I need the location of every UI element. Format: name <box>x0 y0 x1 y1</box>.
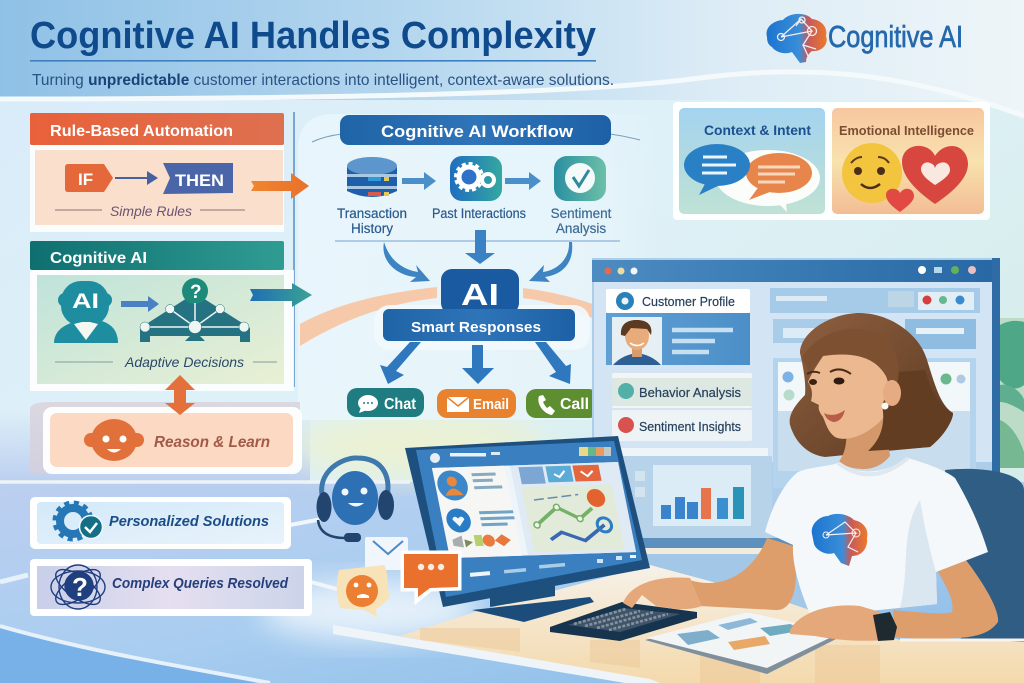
arrow: database to gears <box>402 172 436 190</box>
fringe <box>802 329 899 388</box>
AI person icon <box>54 281 118 343</box>
tangled question icon: ? <box>72 572 88 602</box>
monitor screen contents <box>432 462 636 558</box>
white band <box>592 448 768 456</box>
smile <box>824 410 845 422</box>
arrow: to email <box>462 345 494 384</box>
t-shirt <box>765 458 988 614</box>
arrow: teal <box>250 283 312 307</box>
arrow: to call <box>535 342 571 384</box>
context and intent heading: Context & Intent <box>704 123 812 138</box>
label: transaction history: History <box>351 221 393 236</box>
title: Cognitive AI Handles Complexity <box>30 15 596 57</box>
right dashboard panels <box>770 288 980 488</box>
smart responses halo <box>374 305 590 350</box>
emoji face icon <box>842 143 902 203</box>
customer profile card <box>606 289 750 365</box>
office chair <box>945 469 1024 642</box>
button: chat: Chat <box>384 396 417 413</box>
label: transaction history: Transaction <box>337 206 407 221</box>
eyes and brows <box>807 369 851 385</box>
arrow to decision tree <box>121 296 159 312</box>
simple rules caption: Simple Rules <box>110 203 192 219</box>
button: email: Email <box>473 396 509 413</box>
behavior analysis row: Behavior Analysis <box>639 385 741 400</box>
button: call: Call <box>560 396 589 413</box>
customer profile card: Customer Profile <box>642 294 735 309</box>
logo: Cognitive AI <box>767 14 963 63</box>
behavior analysis row <box>612 373 752 408</box>
double arrow <box>165 375 195 415</box>
panel: rule-based automation: Rule-Based Automation <box>50 123 233 140</box>
icon: sentiment check <box>554 156 606 201</box>
desk <box>333 565 1024 683</box>
icon: sad face bubble <box>337 565 390 617</box>
connector lines <box>290 519 340 590</box>
window dots <box>604 266 976 274</box>
arrow if to then <box>115 171 158 185</box>
large background monitor <box>592 258 1000 548</box>
monitor bottom toolbar <box>470 555 636 577</box>
keyboard <box>550 602 697 641</box>
speech bubbles icon <box>684 144 820 212</box>
personalized solutions label: Personalized Solutions <box>109 513 269 530</box>
avatar <box>613 320 661 365</box>
t-shirt collar <box>838 458 908 474</box>
arrow: orange <box>251 173 309 199</box>
label: sentiment analysis: Sentiment <box>551 206 612 221</box>
left hand <box>623 577 702 609</box>
small heart icon <box>886 189 914 212</box>
complex queries label: Complex Queries Resolved <box>112 575 289 592</box>
neck <box>838 415 890 469</box>
right arm <box>893 555 998 639</box>
orange arc right <box>523 288 602 324</box>
decision network icon <box>140 278 250 342</box>
icon: database <box>347 157 397 197</box>
smart responses bar: Smart Responses <box>411 319 541 336</box>
title underline <box>30 60 596 62</box>
icon: headset robot <box>316 458 394 542</box>
woman <box>623 313 998 641</box>
button: call <box>526 389 599 418</box>
panel: personalized solutions <box>30 497 291 549</box>
smart responses bar <box>383 309 575 341</box>
label: sentiment analysis: Analysis <box>556 221 606 236</box>
heart icon <box>902 146 968 204</box>
label: past interactions: Past Interactions <box>432 206 526 221</box>
right hand <box>790 605 884 641</box>
THEN shape <box>163 163 233 194</box>
button: email <box>437 389 516 418</box>
arrow: left curve <box>383 242 430 282</box>
desktop monitor <box>405 436 650 622</box>
face <box>808 347 890 439</box>
lower chart panel <box>622 456 772 540</box>
orange arc left <box>300 287 437 346</box>
AI person icon: AI <box>72 290 99 313</box>
AI box: AI <box>461 277 499 312</box>
logo text: Cognitive AI <box>828 19 963 54</box>
tangled question icon <box>50 563 106 611</box>
sentiment insights row <box>612 410 752 441</box>
workflow: header: Cognitive AI Workflow <box>381 122 574 141</box>
IF shape: IF <box>78 170 93 189</box>
monitor base stripes <box>610 548 810 614</box>
divider between panels <box>293 112 295 387</box>
monitor top bar <box>430 447 611 463</box>
left arm <box>690 538 796 610</box>
paper on desk <box>645 612 842 674</box>
shirt logo <box>812 514 867 566</box>
IF shape <box>65 164 113 192</box>
panel: cognitive AI: Cognitive AI <box>50 250 147 267</box>
icon: envelope <box>365 537 408 570</box>
AI box <box>441 269 519 314</box>
arrow: center down <box>465 230 495 264</box>
reason and learn label: Reason & Learn <box>154 434 270 451</box>
gear check icon <box>55 503 102 539</box>
panel: context and emotion <box>673 102 990 220</box>
soft bottom table edge highlight <box>900 638 1024 642</box>
ear and earring <box>882 380 901 410</box>
adaptive decisions caption: Adaptive Decisions <box>124 354 244 370</box>
robot face icon <box>84 419 144 461</box>
arrow: to chat <box>380 342 421 384</box>
monitor stand <box>472 575 594 622</box>
arrow: gears to check <box>505 172 541 190</box>
arrow: right curve <box>529 242 572 282</box>
panel: rule-based automation <box>30 113 284 232</box>
smartwatch <box>873 612 897 641</box>
THEN shape: THEN <box>175 171 224 190</box>
panel: cognitive AI workflow background <box>298 114 660 420</box>
hair back <box>790 313 953 457</box>
plant behind monitor <box>1000 318 1024 468</box>
icon: orange chat bubble <box>402 552 460 602</box>
workflow separator <box>335 240 620 242</box>
workflow: header <box>312 115 640 145</box>
panel: complex queries resolved <box>30 559 312 616</box>
panel: cognitive AI <box>30 241 294 391</box>
decision network icon: ? <box>190 282 202 303</box>
right hair lock <box>868 370 953 451</box>
emotional intelligence heading: Emotional Intelligence <box>839 123 974 138</box>
button: chat <box>347 388 424 417</box>
panel: reason and learn <box>30 402 302 474</box>
sentiment insights row: Sentiment Insights <box>639 419 741 434</box>
subtitle: Turning unpredictable customer interactions into intelligent, context-aware solutions. <box>32 72 614 89</box>
icon: gears <box>450 156 502 201</box>
